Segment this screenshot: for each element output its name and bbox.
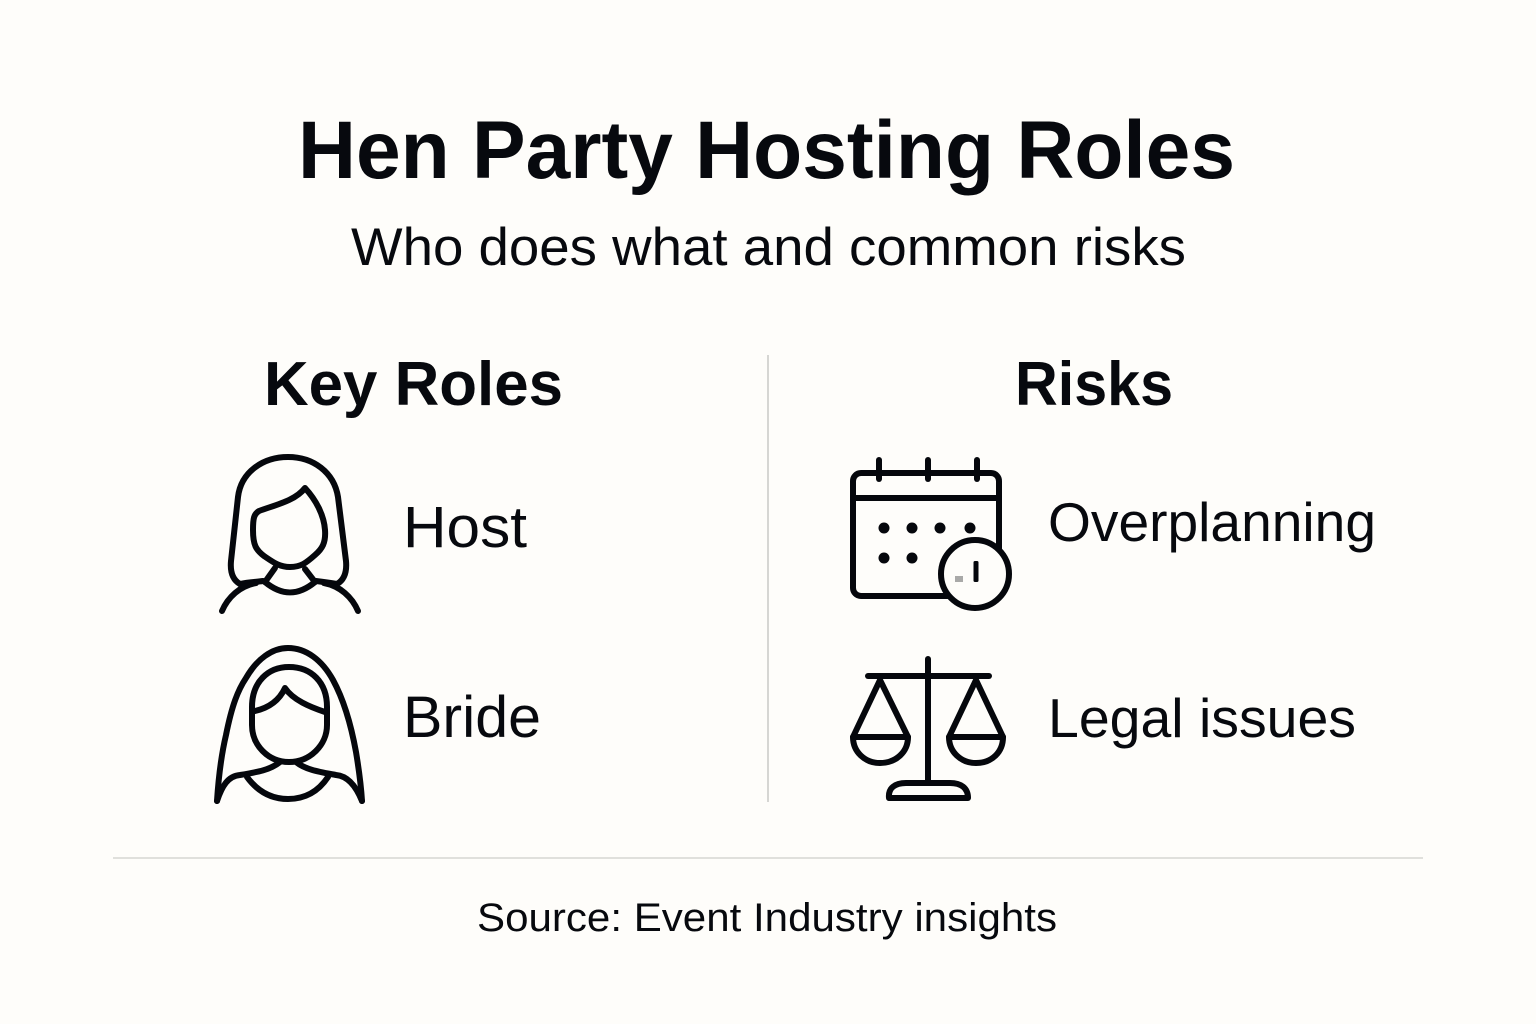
- title: Hen Party Hosting Roles: [298, 105, 1235, 196]
- label: overplanning: Overplanning: [1048, 491, 1376, 553]
- subtitle: Who does what and common risks: [351, 218, 1186, 277]
- heading: key roles: Key Roles: [264, 350, 563, 419]
- label: bride: Bride: [403, 685, 541, 750]
- label: legal issues: Legal issues: [1048, 687, 1356, 749]
- icon: calendar with alert: [853, 460, 1009, 608]
- label: host: Host: [403, 495, 527, 560]
- heading: risks: Risks: [1015, 350, 1173, 419]
- source note: Source: Event Industry insights: [477, 896, 1057, 940]
- icon: host: [222, 457, 358, 611]
- icon: legal scales: [853, 659, 1003, 798]
- icon: bride: [217, 648, 362, 801]
